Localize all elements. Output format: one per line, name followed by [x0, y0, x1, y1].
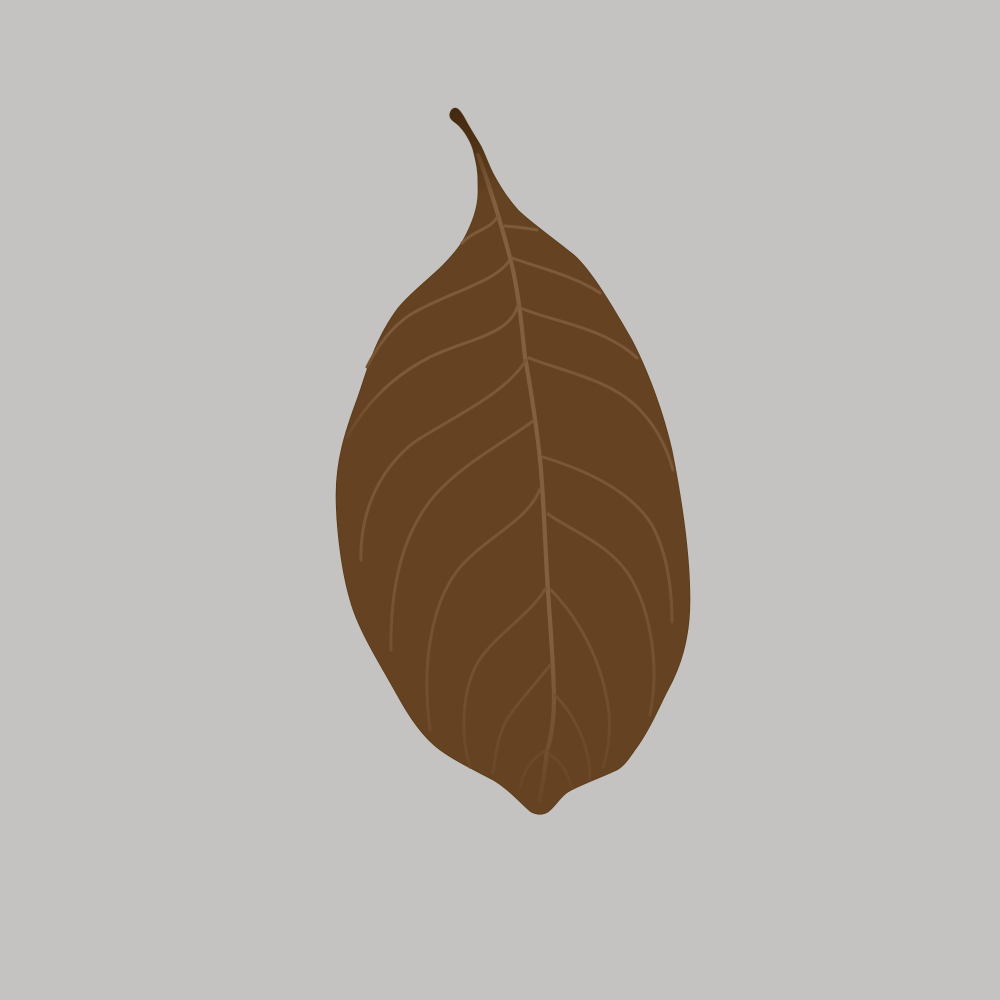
left veins — [462, 216, 498, 243]
veins — [347, 155, 673, 800]
leaf blade — [336, 108, 690, 814]
right veins — [505, 226, 537, 230]
midrib — [478, 155, 554, 800]
